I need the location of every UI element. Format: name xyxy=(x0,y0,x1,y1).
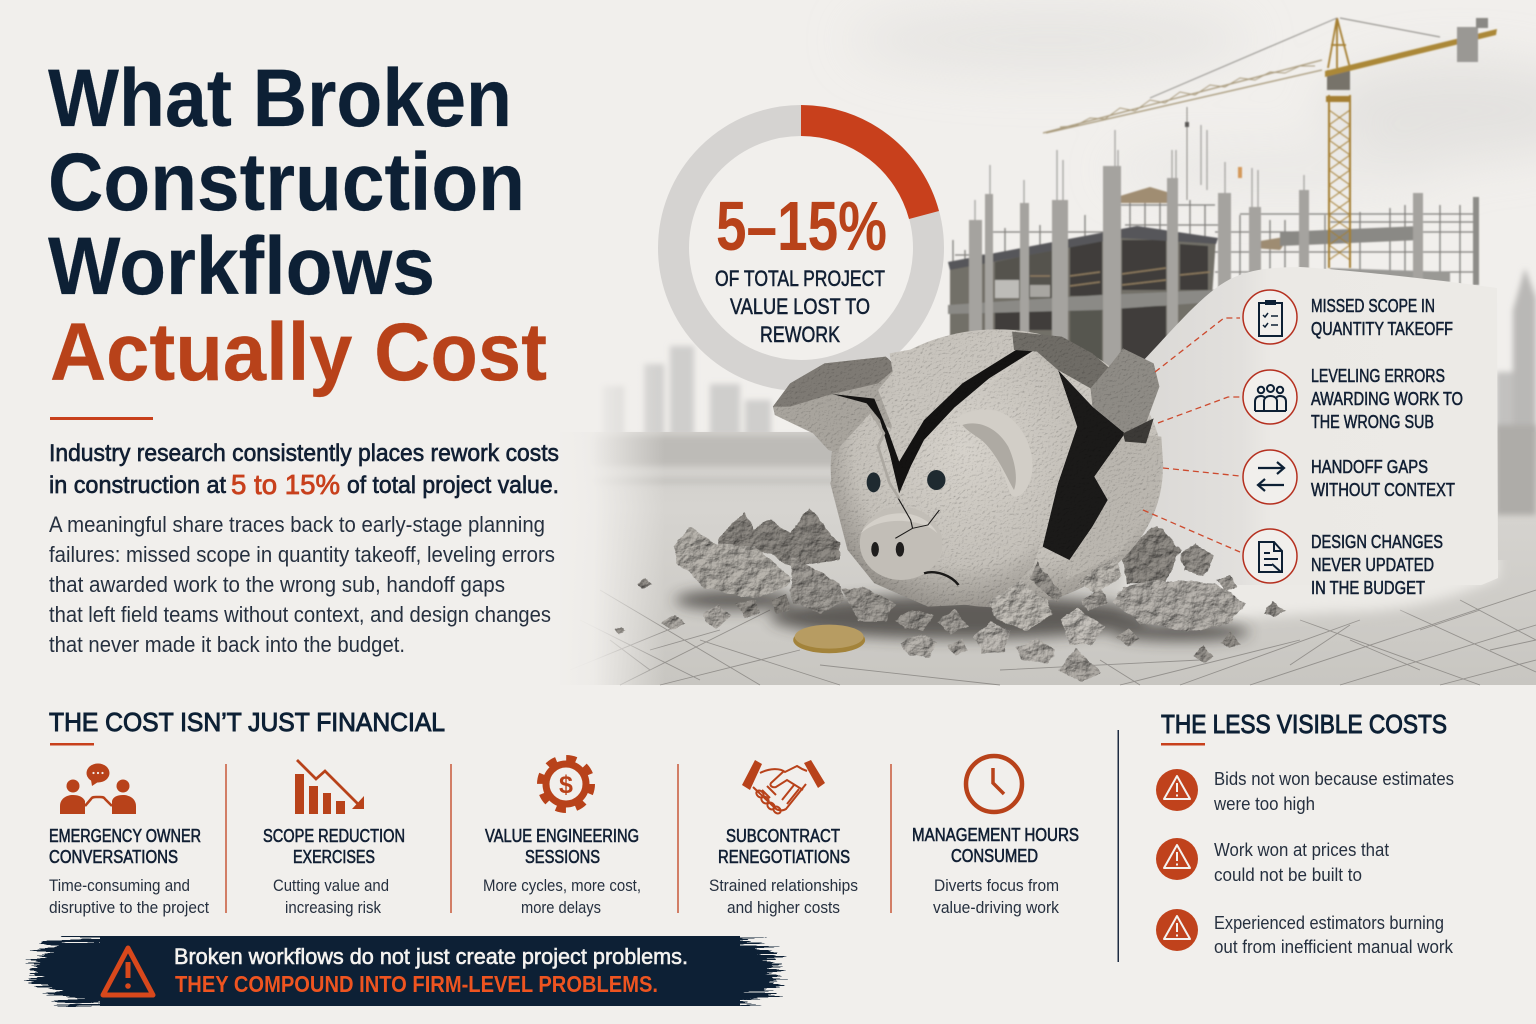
railings xyxy=(1030,268,1210,286)
hook line xyxy=(1186,107,1188,200)
donut caption: VALUE LOST TO xyxy=(730,294,870,319)
cracked sliver by eye xyxy=(872,413,899,498)
brush banner callout xyxy=(32,936,778,1007)
concrete wall panel xyxy=(1120,267,1498,625)
sky clouds xyxy=(850,5,1536,192)
right wing decks xyxy=(1280,226,1420,246)
top cap plate xyxy=(890,331,1016,462)
description: Cutting value and xyxy=(273,877,389,895)
heading xyxy=(718,826,850,867)
cost: bids not won: were too high xyxy=(1213,794,1315,814)
heading: VALUE ENGINEERING xyxy=(485,826,639,846)
rubble and slabs xyxy=(614,527,1286,683)
cost: underpriced work: could not be built to xyxy=(1214,865,1362,885)
heading xyxy=(49,826,201,867)
label: DESIGN CHANGES xyxy=(1311,531,1443,552)
section: the less visible costs xyxy=(1156,709,1454,957)
right shell xyxy=(1066,433,1163,580)
brush ends xyxy=(32,936,778,1007)
label: MISSED SCOPE IN xyxy=(1311,295,1435,316)
description xyxy=(273,877,389,917)
icon: clipboard checklist xyxy=(1243,290,1297,344)
heading: EMERGENCY OWNER xyxy=(49,826,201,846)
title: Actually Cost xyxy=(50,307,547,398)
cost: estimator burnout xyxy=(1156,909,1454,957)
icon: clock xyxy=(966,756,1022,812)
body paragraph: A meaningful share traces back to early-stage planning xyxy=(49,512,545,537)
donut caption xyxy=(715,266,885,347)
ground plane xyxy=(560,432,1536,685)
heading: CONVERSATIONS xyxy=(49,847,178,867)
description: disruptive to the project xyxy=(49,899,209,917)
crane mast xyxy=(1328,18,1350,268)
icon: warning triangle xyxy=(103,948,153,995)
description xyxy=(709,877,858,917)
brush stroke body xyxy=(100,936,740,1006)
banner text: Broken workflows do not just create project problems. xyxy=(174,944,688,969)
pavement cracks xyxy=(570,590,1536,685)
label: WITHOUT CONTEXT xyxy=(1311,479,1455,500)
description: more delays xyxy=(521,899,601,917)
label: QUANTITY TAKEOFF xyxy=(1311,318,1453,339)
description xyxy=(483,877,641,917)
label: NEVER UPDATED xyxy=(1311,554,1434,575)
cost: estimator burnout: out from inefficient manual work xyxy=(1214,937,1454,957)
pale openings xyxy=(995,280,1019,298)
concrete columns xyxy=(969,166,1479,400)
cost: underpriced work: Work won at prices that xyxy=(1214,840,1389,860)
pig eyes xyxy=(867,472,880,492)
failure list: leveling errors xyxy=(1243,365,1463,432)
description: Strained relationships xyxy=(709,877,858,895)
icon: alert xyxy=(1156,838,1198,880)
top-left shard xyxy=(773,357,897,453)
failure list: design changes xyxy=(1243,529,1443,598)
heading: EXERCISES xyxy=(293,847,375,867)
lead statement: in construction at xyxy=(49,472,226,499)
title xyxy=(48,53,547,398)
pig mouth xyxy=(924,572,959,585)
icon: handshake xyxy=(742,760,825,815)
body paragraph: that awarded work to the wrong sub, handoff gaps xyxy=(49,572,505,597)
scaffolding grid xyxy=(953,190,1478,400)
lead statement: Industry research consistently places rework costs xyxy=(49,440,559,467)
main dark crack xyxy=(832,348,1037,497)
icon: edited document xyxy=(1243,529,1297,583)
description xyxy=(49,877,209,917)
heading: MANAGEMENT HOURS xyxy=(912,825,1079,845)
tower crane xyxy=(1043,18,1497,268)
cost: estimator burnout: Experienced estimators burning xyxy=(1214,913,1444,933)
title: Construction xyxy=(48,137,525,228)
item: subcontract renegotiations xyxy=(709,760,858,917)
icon: falling bar chart xyxy=(295,760,364,814)
failure list: missed scope xyxy=(1243,290,1453,344)
section heading: the cost isn't just financial: THE COST ISN’T JUST FINANCIAL xyxy=(49,707,445,737)
pig ear xyxy=(955,410,1033,497)
title: Workflows xyxy=(48,221,435,312)
label xyxy=(1311,456,1455,500)
icon: two people talking xyxy=(60,764,136,814)
hero photo: construction scene xyxy=(555,5,1536,685)
cost: underpriced work xyxy=(1156,838,1389,885)
heading: CONSUMED xyxy=(951,846,1038,866)
gold coin xyxy=(793,625,865,653)
dark bays upper xyxy=(995,240,1208,400)
item: management hours consumed xyxy=(912,756,1079,917)
face plate xyxy=(830,352,1077,607)
body paragraph: that left field teams without context, and design changes xyxy=(49,602,551,627)
label xyxy=(1311,531,1443,598)
title: What Broken xyxy=(48,53,512,144)
unfinished concrete building xyxy=(948,125,1479,400)
lead statement xyxy=(49,440,559,500)
interior dark floors xyxy=(950,228,1216,400)
thin snout crack xyxy=(895,497,939,538)
crane ties xyxy=(1150,18,1440,98)
heading: SUBCONTRACT xyxy=(726,826,840,846)
top rim piece xyxy=(1012,332,1112,388)
body paragraph xyxy=(49,512,555,657)
pig snout xyxy=(860,507,942,580)
label: THE WRONG SUB xyxy=(1311,411,1434,432)
crane jib xyxy=(1043,60,1322,133)
description xyxy=(933,877,1060,917)
description: and higher costs xyxy=(727,899,840,917)
description: increasing risk xyxy=(285,899,382,917)
description: More cycles, more cost, xyxy=(483,877,641,895)
donut caption: REWORK xyxy=(760,322,840,347)
pig body xyxy=(773,329,1163,607)
counterweight xyxy=(1457,27,1478,62)
icon: swap arrows xyxy=(1243,450,1297,504)
broken concrete piggy bank xyxy=(614,329,1286,683)
donut caption: OF TOTAL PROJECT xyxy=(715,266,885,291)
distant ground bands xyxy=(590,425,1536,515)
description: value-driving work xyxy=(933,899,1060,917)
label xyxy=(1311,295,1453,339)
counter jib xyxy=(1325,29,1497,77)
cost: bids not won: Bids not won because estimates xyxy=(1214,769,1454,789)
banner text xyxy=(174,944,688,997)
label: IN THE BUDGET xyxy=(1311,577,1425,598)
icon: dollar gear xyxy=(541,759,591,809)
label xyxy=(1311,365,1463,432)
banner text: THEY COMPOUND INTO FIRM-LEVEL PROBLEMS. xyxy=(175,971,658,997)
donut value: 5–15% xyxy=(716,187,887,265)
callout connector lines xyxy=(1143,318,1240,552)
item: emergency owner conversations xyxy=(49,764,209,917)
lead statement: of total project value. xyxy=(347,472,559,499)
lead statement: 5 to 15% xyxy=(231,469,340,500)
wooden platforms xyxy=(1120,187,1167,203)
donut chart: 5-15% xyxy=(674,120,928,376)
rubble behind xyxy=(717,508,1215,583)
heading: SESSIONS xyxy=(525,847,600,867)
ring track xyxy=(674,120,928,376)
icon: alert xyxy=(1156,909,1198,951)
cost: bids not won xyxy=(1156,769,1454,814)
heading xyxy=(263,826,405,867)
label: LEVELING ERRORS xyxy=(1311,365,1445,386)
item: value engineering sessions xyxy=(483,759,641,917)
floor slabs xyxy=(948,226,1218,270)
heading: SCOPE REDUCTION xyxy=(263,826,405,846)
orange marker xyxy=(1238,167,1242,178)
label: AWARDING WORK TO xyxy=(1311,388,1463,409)
top right shard xyxy=(1091,348,1159,433)
item: scope reduction exercises xyxy=(263,760,405,917)
description: Time-consuming and xyxy=(49,877,190,895)
icon: dollar gear: $ xyxy=(559,771,573,799)
left photo fade xyxy=(555,300,665,685)
label: HANDOFF GAPS xyxy=(1311,456,1428,477)
heading: RENEGOTIATIONS xyxy=(718,847,850,867)
heading xyxy=(485,826,639,867)
heading: THE LESS VISIBLE COSTS xyxy=(1161,709,1447,739)
icon: three people xyxy=(1243,370,1297,424)
body paragraph: that never made it back into the budget. xyxy=(49,632,405,657)
icon: alert xyxy=(1156,769,1198,811)
rebar xyxy=(975,125,1304,220)
title rule xyxy=(50,417,153,420)
failure list: handoff gaps xyxy=(1243,450,1455,504)
heading xyxy=(912,825,1079,866)
body paragraph: failures: missed scope in quantity takeoff, leveling errors xyxy=(49,542,555,567)
rubble contact shadows xyxy=(675,590,1250,641)
description: Diverts focus from xyxy=(934,877,1059,895)
ring highlighted share xyxy=(801,120,924,215)
distant city skyline xyxy=(602,268,1536,520)
right side hole xyxy=(1043,370,1125,560)
